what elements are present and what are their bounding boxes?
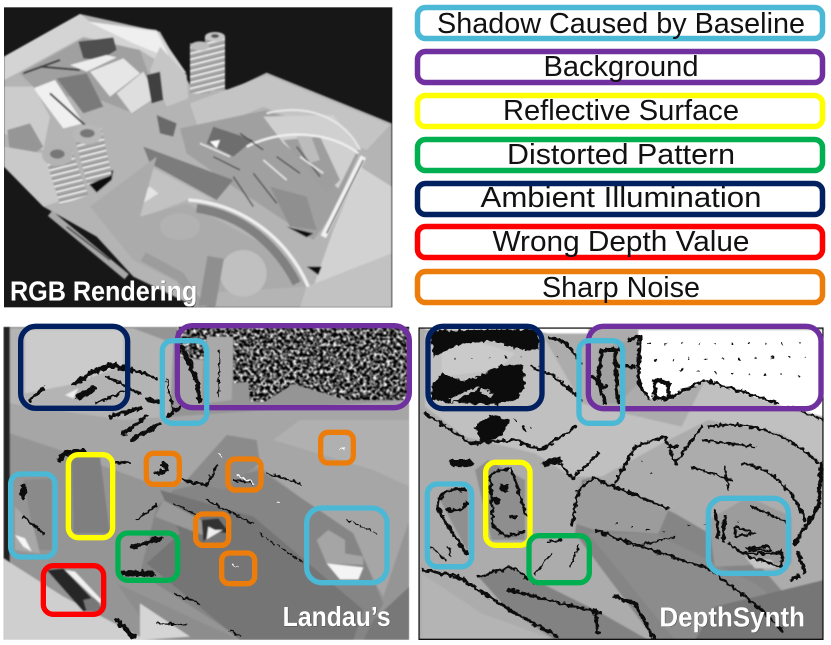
- box: reflective surface: [486, 462, 530, 545]
- annotation boxes: [11, 326, 409, 614]
- legend item: background: [418, 51, 822, 83]
- legend item: wrong depth value: [418, 226, 822, 258]
- box: shadow top: [579, 341, 623, 423]
- box: shadow top: [162, 341, 207, 423]
- box: sharp noise 1: [146, 453, 179, 484]
- box: sharp noise 4: [222, 553, 255, 584]
- box: wrong depth value: [43, 566, 104, 614]
- box: background: [588, 326, 821, 409]
- legend item: distorted pattern: Distorted Pattern: [507, 139, 735, 171]
- legend item: sharp noise: Sharp Noise: [542, 272, 700, 304]
- legend item: sharp noise: [418, 272, 822, 304]
- legend item: reflective surface: Reflective Surface: [503, 95, 739, 127]
- 3D machine rendering: [4, 14, 392, 308]
- black edges: [423, 329, 824, 640]
- box: shadow left: [427, 484, 472, 567]
- panel: Landau's depth map: [3, 326, 409, 640]
- box: ambient illumination: [21, 326, 128, 408]
- box: shadow left: [11, 474, 55, 557]
- caption: Landau's: Landau’s: [283, 601, 391, 632]
- box: sharp noise 2: [228, 459, 261, 490]
- box: shadow right: [307, 508, 387, 583]
- box: background: [177, 326, 409, 408]
- legend: [418, 8, 822, 304]
- springs: [42, 32, 225, 205]
- box: distorted pattern: [118, 533, 178, 580]
- box: sharp noise top right: [321, 432, 353, 463]
- box: shadow right: [708, 498, 788, 573]
- legend item: ambient illumination: Ambient Illumination: [480, 182, 762, 214]
- legend item: ambient illumination: [418, 182, 822, 214]
- caption: DepthSynth: DepthSynth: [659, 602, 805, 633]
- box: sharp noise 3: [196, 514, 229, 545]
- caption: RGB Rendering: RGB Rendering: [10, 275, 197, 306]
- depth image: [3, 327, 409, 640]
- legend item: background: Background: [544, 51, 698, 83]
- annotation boxes: [427, 326, 821, 583]
- depth image: [418, 327, 824, 640]
- legend item: wrong depth value: Wrong Depth Value: [492, 226, 750, 258]
- legend item: shadow: Shadow Caused by Baseline: [437, 8, 805, 40]
- legend item: distorted pattern: [418, 139, 822, 171]
- background noise region: [177, 327, 409, 402]
- box: distorted pattern: [529, 536, 589, 583]
- box: reflective surface: [68, 455, 113, 538]
- black dropouts: [23, 347, 377, 637]
- box: ambient illumination: [428, 326, 542, 409]
- panel: DepthSynth depth map: [418, 326, 824, 640]
- legend item: reflective surface: [418, 95, 822, 127]
- panel: RGB rendering: [4, 7, 392, 308]
